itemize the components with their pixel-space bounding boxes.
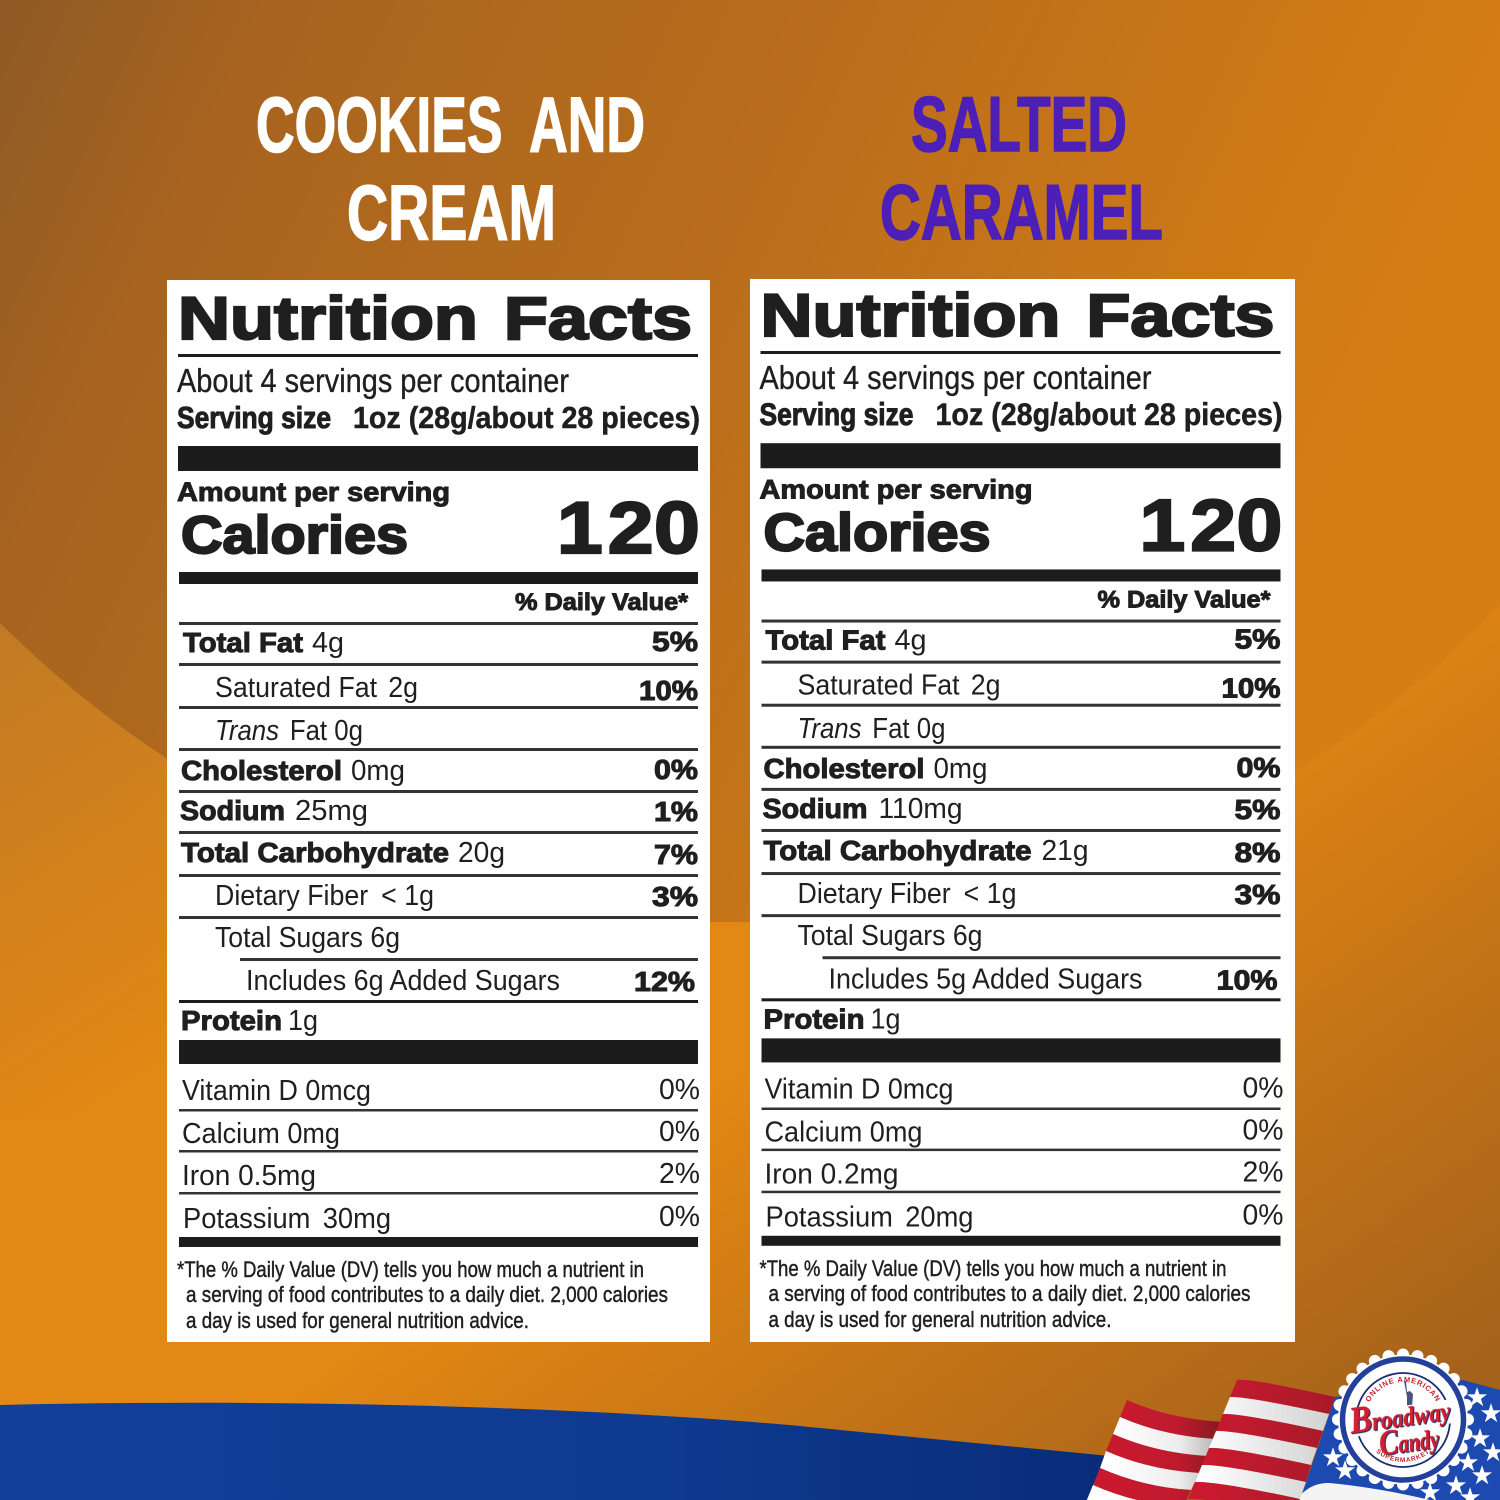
serving size: 1oz (28g/about 28 pieces) [936, 397, 1282, 432]
servings per container: About 4 servings per container [177, 362, 569, 399]
row: calcium [182, 1116, 700, 1150]
row: iron: Iron 0.2mg [764, 1159, 898, 1191]
seal wordmark [1345, 1386, 1463, 1467]
heading: cookies and cream [256, 80, 645, 256]
row: saturated fat: Saturated Fat 2g [215, 672, 418, 704]
row: sodium: 110mg [878, 793, 962, 825]
row: sodium: 1% [654, 796, 698, 827]
row: total fat: 5% [652, 626, 698, 657]
flag stripes right fold [1188, 1380, 1335, 1500]
row: total carbohydrate: Total Carbohydrate [181, 837, 449, 868]
heading: cookies and cream: COOKIES AND [256, 80, 645, 168]
row: protein: Protein [764, 1003, 864, 1034]
row: total fat [183, 626, 698, 659]
row: dietary fiber: 3% [1234, 879, 1281, 910]
row: cholesterol: 0% [1236, 752, 1281, 783]
footnote: a serving of food contributes to a daily diet. 2,000 calories [186, 1282, 668, 1307]
row: saturated fat [798, 670, 1281, 704]
row: total sugars: Total Sugars 6g [798, 920, 983, 952]
row: vitamin d: 0% [659, 1074, 700, 1106]
flag stripes left fold [1086, 1400, 1223, 1500]
flag canton with stars: ★ [1465, 1383, 1489, 1413]
row: saturated fat: 10% [639, 675, 698, 706]
panel: salted caramel nutrition label [750, 279, 1295, 1342]
seal bottom text: SUPERMARKET [1376, 1449, 1428, 1462]
row: cholesterol: 0mg [351, 755, 405, 787]
row: iron [764, 1157, 1284, 1191]
row: protein [181, 1005, 318, 1037]
row: dietary fiber: Dietary Fiber < 1g [798, 878, 1016, 910]
row: protein: 1g [288, 1005, 318, 1037]
flag canton with stars: ★ [1456, 1448, 1480, 1478]
row: iron [182, 1158, 700, 1192]
serving size: 1oz (28g/about 28 pieces) [353, 400, 700, 435]
row: potassium: 0% [659, 1201, 700, 1233]
row: total carbohydrate: Total Carbohydrate [764, 835, 1032, 866]
row: vitamin d: Vitamin D 0mcg [764, 1073, 954, 1106]
calories value: 120 [1139, 484, 1282, 566]
row: potassium: 0% [1242, 1200, 1283, 1232]
row: added sugars: Includes 6g Added Sugars [246, 965, 560, 997]
amount per serving: Amount per serving [177, 477, 450, 507]
row: added sugars: 12% [634, 966, 695, 997]
row: vitamin d: Vitamin D 0mcg [182, 1075, 371, 1107]
row: calcium: 0% [1242, 1115, 1283, 1147]
row: total fat: 5% [1234, 624, 1281, 655]
row: calcium: Calcium 0mg [182, 1118, 340, 1150]
row: sodium: 5% [1234, 794, 1281, 825]
seal top text: ONLINE AMERICAN [1366, 1376, 1440, 1402]
row: cholesterol: Cholesterol [181, 755, 342, 786]
row: saturated fat: 10% [1222, 673, 1281, 704]
row: dietary fiber [215, 880, 698, 912]
flag canton with stars: ★ [1468, 1424, 1492, 1454]
row: total carbohydrate [764, 835, 1281, 868]
panel: cookies and cream nutrition label [167, 280, 710, 1342]
footnote: a day is used for general nutrition advice. [768, 1307, 1112, 1332]
row: cholesterol [181, 754, 698, 787]
row: calcium: 0% [659, 1116, 700, 1148]
heading: salted caramel: SALTED [911, 80, 1127, 168]
row: total fat: 4g [894, 625, 926, 657]
row: sodium: Sodium [180, 795, 285, 826]
serving size: Serving size [760, 397, 914, 432]
row: dietary fiber: 3% [652, 881, 698, 912]
seal wordmark: Candy [1376, 1415, 1442, 1463]
brand seal: broadway candy [1332, 1348, 1474, 1490]
row: total carbohydrate [181, 837, 698, 870]
heading: salted caramel [880, 80, 1163, 256]
row: added sugars: Includes 5g Added Sugars [828, 963, 1143, 995]
american flag [1086, 1380, 1500, 1500]
footnote [760, 1256, 1250, 1332]
row: total fat: 4g [312, 627, 344, 659]
serving size: Serving size [177, 400, 331, 435]
row: sodium [180, 795, 698, 827]
row: total carbohydrate: 7% [654, 839, 698, 870]
row: iron: 2% [1242, 1157, 1283, 1189]
row: protein [764, 1003, 900, 1035]
blue wave band [0, 1403, 1110, 1500]
row: sodium [762, 793, 1281, 825]
row: total carbohydrate: 20g [458, 837, 505, 869]
row: cholesterol [764, 752, 1281, 785]
row: trans fat: Trans Fat 0g [798, 713, 946, 745]
footnote: *The % Daily Value (DV) tells you how much a nutrient in [760, 1256, 1227, 1281]
row: iron: 2% [659, 1158, 700, 1190]
heading: cookies and cream: CREAM [347, 168, 556, 256]
seal statue of liberty [1404, 1381, 1413, 1408]
daily value header: % Daily Value* [1098, 586, 1271, 614]
row: cholesterol: 0mg [934, 753, 988, 785]
row: added sugars: 10% [1216, 964, 1278, 995]
label title: Nutrition Facts [761, 282, 1275, 349]
row: vitamin d: 0% [1242, 1072, 1283, 1105]
amount per serving: Amount per serving [760, 474, 1032, 504]
row: vitamin d [764, 1072, 1284, 1106]
row: potassium: Potassium 20mg [766, 1202, 974, 1234]
flag canton with stars: ★ [1470, 1461, 1494, 1491]
row: dietary fiber: Dietary Fiber < 1g [215, 880, 434, 912]
footnote: a day is used for general nutrition advice. [186, 1308, 529, 1333]
daily value header: % Daily Value* [515, 589, 689, 616]
serving size [177, 400, 700, 435]
row: sodium: Sodium [762, 793, 868, 824]
row: total fat: Total Fat [183, 627, 303, 658]
row: potassium: Potassium 30mg [183, 1203, 391, 1235]
row: total fat [766, 624, 1281, 657]
row: saturated fat [215, 672, 698, 706]
row: trans fat: Trans Fat 0g [215, 715, 363, 747]
row: saturated fat: Saturated Fat 2g [798, 670, 1001, 702]
servings per container: About 4 servings per container [760, 359, 1152, 396]
row: vitamin d [182, 1074, 700, 1107]
row: dietary fiber [798, 878, 1281, 910]
row: calcium: Calcium 0mg [764, 1117, 922, 1149]
seal wordmark: Broadway [1346, 1387, 1453, 1442]
row: total fat: Total Fat [766, 625, 886, 656]
row: calcium [764, 1115, 1284, 1149]
calories value: 120 [557, 486, 700, 569]
row: potassium [183, 1201, 700, 1235]
row: protein: Protein [181, 1005, 282, 1036]
footnote: a serving of food contributes to a daily diet. 2,000 calories [768, 1281, 1250, 1306]
row: cholesterol: 0% [654, 754, 698, 785]
row: cholesterol: Cholesterol [764, 753, 924, 784]
row: protein: 1g [870, 1003, 901, 1035]
flag canton with stars [1296, 1380, 1500, 1500]
row: iron: Iron 0.5mg [182, 1160, 316, 1192]
serving size [760, 397, 1282, 432]
footnote: *The % Daily Value (DV) tells you how much a nutrient in [177, 1257, 644, 1282]
calories: Calories [181, 506, 408, 565]
label title: Nutrition Facts [178, 285, 692, 352]
footnote [177, 1257, 668, 1333]
row: total carbohydrate: 8% [1234, 837, 1281, 868]
flag canton with stars: ★ [1321, 1443, 1345, 1473]
calories: Calories [764, 503, 990, 562]
row: total sugars: Total Sugars 6g [215, 922, 400, 954]
row: total carbohydrate: 21g [1042, 835, 1089, 867]
row: sodium: 25mg [295, 795, 368, 827]
flag canton with stars: ★ [1333, 1456, 1357, 1486]
row: potassium [766, 1200, 1284, 1234]
heading: salted caramel: CARAMEL [880, 168, 1163, 256]
